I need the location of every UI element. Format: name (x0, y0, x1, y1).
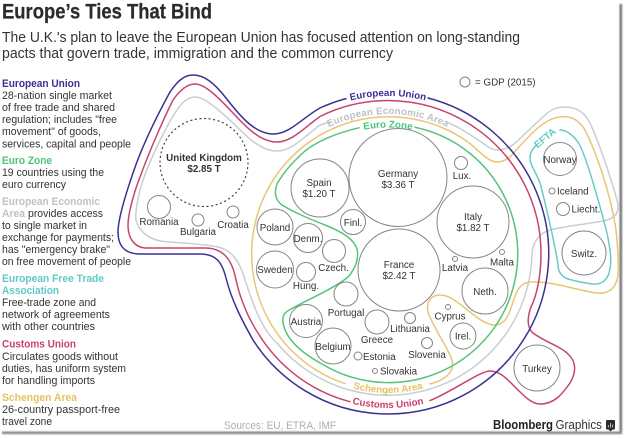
non-euro EU circles (139, 196, 349, 292)
subtitle: pacts that govern trade, immigration and the common currency (2, 45, 393, 62)
Bloomberg Graphics logo: Bloomberg (493, 417, 553, 432)
United Kingdom circle: $2.85 T (187, 164, 221, 175)
France: $2.42 T (382, 271, 416, 282)
Netherlands: Neth. (473, 287, 497, 298)
boundary: Euro Zone (275, 127, 518, 383)
Belgium (315, 328, 351, 364)
Bulgaria (180, 214, 217, 238)
Switzerland: Switz. (571, 249, 597, 260)
France (358, 229, 440, 311)
United Kingdom circle (160, 118, 248, 206)
Finland (340, 210, 366, 234)
France: France (384, 260, 415, 271)
Austria: Austria (291, 317, 322, 328)
Cyprus (434, 304, 466, 322)
Belgium: Belgium (315, 342, 351, 353)
Slovenia: Slovenia (408, 350, 446, 361)
legend: Euro Zone: euro currency (2, 179, 67, 191)
icon: chart badge (606, 420, 615, 432)
Turkey: Turkey (522, 364, 552, 375)
label: European Union: European Union (350, 90, 426, 100)
legend: Euro Zone: 19 countries using the (2, 167, 104, 179)
boundary: European Union (118, 75, 549, 414)
legend: Schengen Area: 26-country passport-free (2, 404, 120, 416)
legend: Schengen Area (2, 392, 120, 428)
legend: European Free Trade Association: network of agreements (2, 309, 110, 321)
Norway: Norway (543, 155, 577, 166)
Greece: Greece (361, 335, 394, 346)
subtitle (2, 29, 520, 62)
Estonia: Estonia (363, 352, 396, 363)
sources: Sources: EU, ETRA, IMF (224, 420, 337, 432)
legend: European Economic Area: European Economic (2, 196, 100, 208)
legend: European Free Trade Association: Association (2, 285, 59, 297)
legend: Euro Zone (2, 155, 104, 191)
legend: European Union: services, capital and people (2, 138, 131, 150)
legend: European Economic Area: Area (2, 208, 26, 220)
boundary: Customs Union (128, 84, 575, 404)
Switzerland (562, 231, 606, 275)
legend: European Economic Area (2, 196, 131, 268)
label: Customs Union: Customs Union (353, 398, 424, 408)
Portugal: Portugal (328, 308, 364, 319)
Malta (490, 250, 515, 268)
label: EFTA: EFTA (532, 126, 558, 151)
Bloomberg Graphics logo (493, 417, 615, 432)
Czech Republic (318, 240, 349, 274)
Poland (257, 209, 293, 245)
Greece (361, 310, 394, 346)
Germany: Germany (378, 169, 418, 180)
Croatia (217, 206, 249, 231)
Italy (437, 186, 509, 258)
Bloomberg Graphics logo: Graphics (556, 417, 602, 432)
Romania (139, 196, 179, 228)
legend: European Economic Area: has "emergency brake" (2, 244, 110, 256)
Cyprus: Cyprus (434, 312, 466, 322)
Lithuania: Lithuania (390, 324, 430, 335)
Turkey (514, 345, 560, 391)
boundary labels (326, 90, 558, 408)
Latvia: Latvia (442, 263, 469, 274)
Netherlands (462, 268, 508, 314)
Czech Republic: Czech. (318, 263, 349, 274)
boundary: Schengen Area (252, 117, 618, 384)
legend: Customs Union: Circulates goods without (2, 351, 118, 363)
Sweden (256, 251, 294, 288)
Germany (349, 128, 447, 226)
Liechtenstein (556, 202, 600, 216)
subtitle: The U.K.'s plan to leave the European Union has focused attention on long-standing (2, 29, 520, 46)
Slovakia: Slovakia (380, 366, 418, 378)
legend: European Free Trade Association: Free-trade zone and (2, 297, 96, 309)
Malta: Malta (490, 258, 515, 268)
boundary: European Economic Area (136, 97, 618, 395)
Hungary: Hung. (293, 281, 319, 292)
label: Euro Zone: Euro Zone (363, 120, 412, 130)
Croatia: Croatia (217, 220, 249, 231)
Germany: $3.36 T (381, 180, 415, 191)
Ireland: Irel. (455, 332, 471, 342)
Slovenia (408, 338, 446, 361)
GDP size key: = GDP (2015) (475, 78, 536, 88)
legend: European Union: 28-nation single market (2, 90, 112, 102)
Sweden: Sweden (257, 265, 293, 276)
legend: European Union: European Union (2, 78, 80, 90)
legend: European Economic Area: exchange for payments; (2, 232, 114, 244)
Spain (291, 159, 349, 217)
legend: European Economic Area: to single market in (2, 220, 87, 232)
Ireland (450, 323, 476, 349)
Norway (543, 142, 577, 176)
legend: European Economic Area: on free movement of people (2, 256, 131, 268)
Luxembourg (453, 156, 471, 182)
legend: European Free Trade Association: with other countries (1, 321, 95, 333)
legend: European Union: regulation; includes "free (2, 114, 117, 126)
United Kingdom circle: United Kingdom (166, 153, 242, 164)
euro zone circles (290, 128, 515, 378)
legend: Customs Union (2, 338, 126, 387)
legend: European Free Trade Association (1, 273, 110, 333)
Denmark: Denm. (294, 234, 322, 245)
Spain: Spain (306, 178, 332, 189)
legend text: definitions of each pact (1, 78, 131, 428)
legend: European Union: movement" of goods, (2, 126, 101, 138)
Portugal (328, 282, 364, 319)
legend: Schengen Area: Schengen Area (2, 392, 78, 404)
legend: Customs Union: Customs Union (2, 338, 76, 350)
Iceland: Iceland (557, 186, 589, 198)
Latvia (442, 256, 469, 274)
legend: Customs Union: duties, has uniform system (2, 363, 126, 375)
Lithuania (390, 312, 430, 335)
Italy: Italy (464, 212, 482, 223)
Bulgaria: Bulgaria (180, 227, 217, 238)
Italy: $1.82 T (456, 223, 490, 234)
Romania: Romania (139, 217, 179, 228)
Hungary (293, 262, 319, 292)
label: Schengen Area: Schengen Area (354, 382, 424, 395)
Poland: Poland (260, 223, 290, 234)
legend: European Union: of free trade and shared (2, 102, 115, 114)
legend: Schengen Area: travel zone (2, 416, 52, 428)
Finland: Finl. (344, 218, 362, 229)
title: Europe’s Ties That Bind (2, 0, 212, 24)
Liechtenstein: Liecht. (572, 204, 600, 216)
EFTA and Turkey circles (514, 142, 606, 391)
legend: European Union (2, 78, 131, 150)
legend: European Free Trade Association: European Free Trade (2, 273, 104, 285)
label: European Economic Area: European Economic Area (326, 107, 448, 127)
legend: Customs Union: for handling imports (2, 375, 95, 387)
boundary: EFTA (530, 130, 611, 284)
legend: European Economic Area: provides access (28, 208, 103, 220)
Spain: $1.20 T (302, 189, 336, 200)
Luxembourg: Lux. (453, 171, 471, 182)
legend: Euro Zone: Euro Zone (2, 155, 52, 167)
Austria (290, 304, 322, 338)
Denmark (294, 224, 322, 252)
